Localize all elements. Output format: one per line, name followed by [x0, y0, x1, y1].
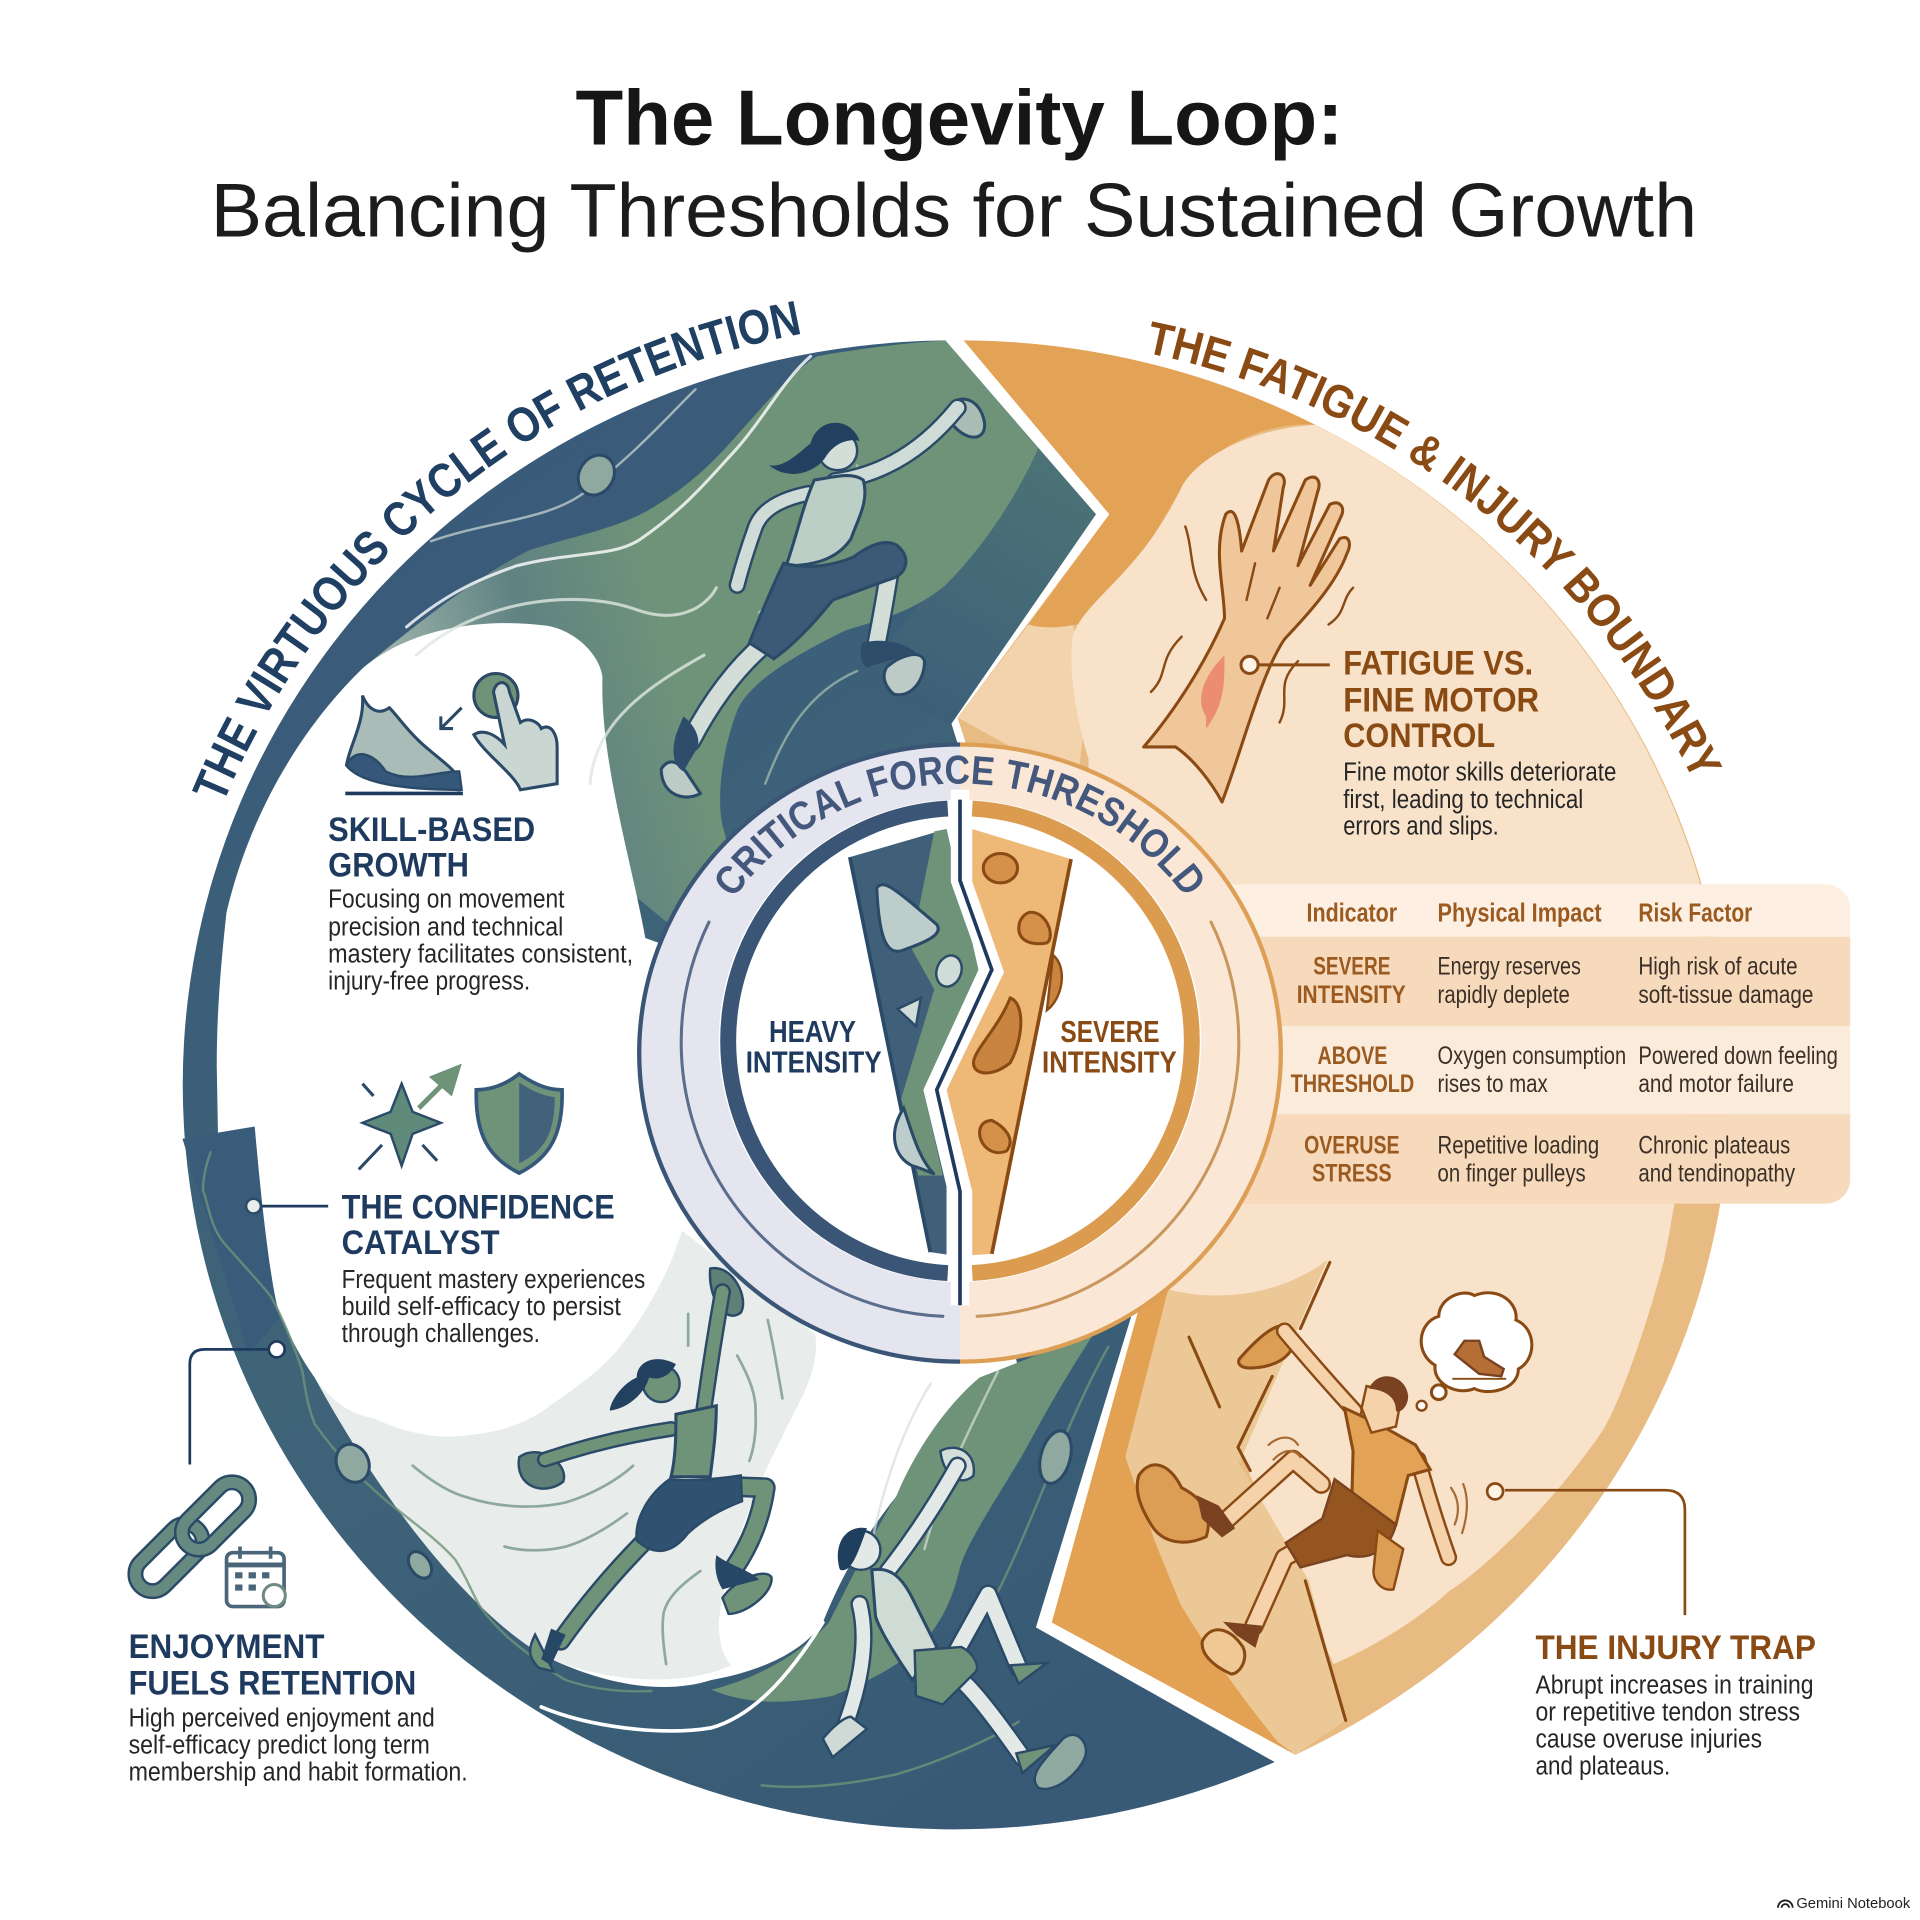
data table: High risk of acute: [1638, 953, 1798, 981]
text block: skill-based growth: Focusing on movement: [328, 885, 564, 913]
threshold divider: [937, 790, 992, 1305]
climbing holds: [330, 449, 1077, 1583]
label: severe intensity: [1042, 1015, 1177, 1080]
callout: fatigue vs fine motor control: FINE MOTOR: [1343, 681, 1539, 719]
callout: fatigue vs fine motor control: Fine motor skills deteriorate: [1343, 759, 1616, 787]
data table: ABOVE: [1318, 1042, 1387, 1070]
text block: skill-based growth: precision and technical: [328, 914, 563, 942]
climber: slipping climber: [1137, 1325, 1467, 1674]
data table: on finger pulleys: [1438, 1160, 1586, 1188]
callout: the confidence catalyst: THE CONFIDENCE: [342, 1188, 615, 1226]
data table: Oxygen consumption: [1438, 1042, 1626, 1070]
data table: THRESHOLD: [1291, 1070, 1414, 1098]
lower green wall: [711, 1332, 1095, 1702]
data table: [1224, 884, 1850, 1204]
text block: enjoyment fuels retention: FUELS RETENTION: [129, 1665, 416, 1703]
text block: enjoyment fuels retention: [129, 1628, 468, 1786]
data table: soft-tissue damage: [1638, 981, 1813, 1009]
data table: rapidly deplete: [1438, 981, 1570, 1009]
callout: the confidence catalyst: build self-efficacy to persist: [342, 1293, 621, 1321]
central ring: critical force threshold: [637, 742, 1283, 1364]
text block: enjoyment fuels retention: self-efficacy predict long term: [129, 1731, 430, 1759]
callout: the injury trap: or repetitive tendon stress: [1536, 1698, 1800, 1726]
data table: Chronic plateaus: [1638, 1131, 1790, 1159]
label: heavy intensity: [746, 1015, 882, 1080]
callout: fatigue vs fine motor control: [1241, 645, 1616, 841]
callout: enjoyment connector: [190, 1341, 285, 1464]
data table: Repetitive loading: [1438, 1131, 1599, 1159]
split rock: severe side: [947, 829, 1071, 1255]
data table: Powered down feeling: [1638, 1042, 1838, 1070]
label: heavy intensity: INTENSITY: [746, 1046, 882, 1080]
panel: fatigue and injury half: [958, 340, 1730, 1755]
heading: the virtuous cycle of retention: THE VIRTUOUS CYCLE OF RETENTION: [192, 301, 800, 796]
callout: the injury trap: cause overuse injuries: [1536, 1725, 1762, 1753]
data table: SEVERE: [1313, 953, 1390, 981]
callout: the injury trap: [1487, 1483, 1816, 1780]
data table: Energy reserves: [1438, 953, 1581, 981]
callout: fatigue vs fine motor control: first, leading to technical: [1343, 786, 1583, 814]
label: severe intensity: SEVERE: [1060, 1015, 1160, 1049]
icon: chain links: [128, 1475, 256, 1598]
data table: Risk Factor: [1638, 900, 1752, 928]
data table: OVERUSE: [1304, 1131, 1400, 1159]
callout: fatigue vs fine motor control: errors and slips.: [1343, 813, 1499, 841]
callout: the injury trap: THE INJURY TRAP: [1536, 1629, 1816, 1667]
icon: fatigued hand: [1144, 474, 1353, 802]
text block: skill-based growth: GROWTH: [328, 847, 469, 885]
split rock: heavy side: [850, 829, 978, 1254]
data table: Indicator: [1307, 900, 1397, 928]
callout: the injury trap: and plateaus.: [1536, 1752, 1670, 1780]
climber: lower athlete in white: [823, 1448, 1086, 1789]
text block: skill-based growth: SKILL-BASED: [328, 811, 535, 849]
data table: and motor failure: [1638, 1070, 1794, 1098]
data table: Physical Impact: [1438, 900, 1602, 928]
label: severe intensity: INTENSITY: [1042, 1046, 1177, 1080]
text block: skill-based growth: [328, 811, 633, 995]
heading: the fatigue and injury boundary: THE FATIGUE & INJURY BOUNDARY: [1151, 321, 1722, 772]
callout: the confidence catalyst: Frequent mastery experiences: [342, 1266, 645, 1294]
text block: enjoyment fuels retention: High perceived enjoyment and: [129, 1705, 435, 1733]
grey swoosh: [315, 1231, 816, 1679]
rock wall: [1125, 1260, 1346, 1755]
callout: the confidence catalyst: CATALYST: [342, 1224, 500, 1262]
icon: climbing shoe and pointing hand: [345, 673, 557, 793]
curved label: CRITICAL FORCE THRESHOLD: [716, 755, 1202, 893]
text block: enjoyment fuels retention: membership and habit formation.: [129, 1758, 468, 1786]
title: The Longevity Loop:: [576, 73, 1343, 161]
text block: skill-based growth: injury-free progress.: [328, 967, 530, 995]
label: heavy intensity: HEAVY: [769, 1015, 856, 1049]
callout: the confidence catalyst: through challenges.: [342, 1320, 540, 1348]
title: Balancing Thresholds for Sustained Growth: [211, 168, 1697, 253]
data table: and tendinopathy: [1638, 1160, 1795, 1188]
callout: fatigue vs fine motor control: FATIGUE VS.: [1343, 645, 1533, 683]
climber: upper athlete reaching for hold: [661, 399, 985, 797]
data table: rises to max: [1438, 1070, 1548, 1098]
data table: INTENSITY: [1297, 981, 1406, 1009]
icon: thought bubble with foot: [1417, 1293, 1532, 1411]
climber: middle athlete in green: [519, 1268, 772, 1671]
icon: recurring calendar: [227, 1547, 285, 1607]
panel: virtuous cycle half: [182, 340, 1275, 1829]
text block: enjoyment fuels retention: ENJOYMENT: [129, 1628, 325, 1666]
callout: the confidence catalyst: [246, 1188, 645, 1348]
white content area: [217, 623, 1018, 1687]
text block: skill-based growth: mastery facilitates consistent,: [328, 940, 633, 968]
icon: star, arrow and shield: [359, 1068, 562, 1173]
cream interior: [1071, 425, 1701, 1664]
data table: STRESS: [1312, 1160, 1392, 1188]
callout: fatigue vs fine motor control: CONTROL: [1343, 717, 1495, 755]
motion lines: [413, 1314, 782, 1664]
title: [211, 73, 1697, 253]
watermark: Gemini Notebook: [1796, 1896, 1911, 1912]
callout: the injury trap: Abrupt increases in training: [1536, 1671, 1813, 1699]
